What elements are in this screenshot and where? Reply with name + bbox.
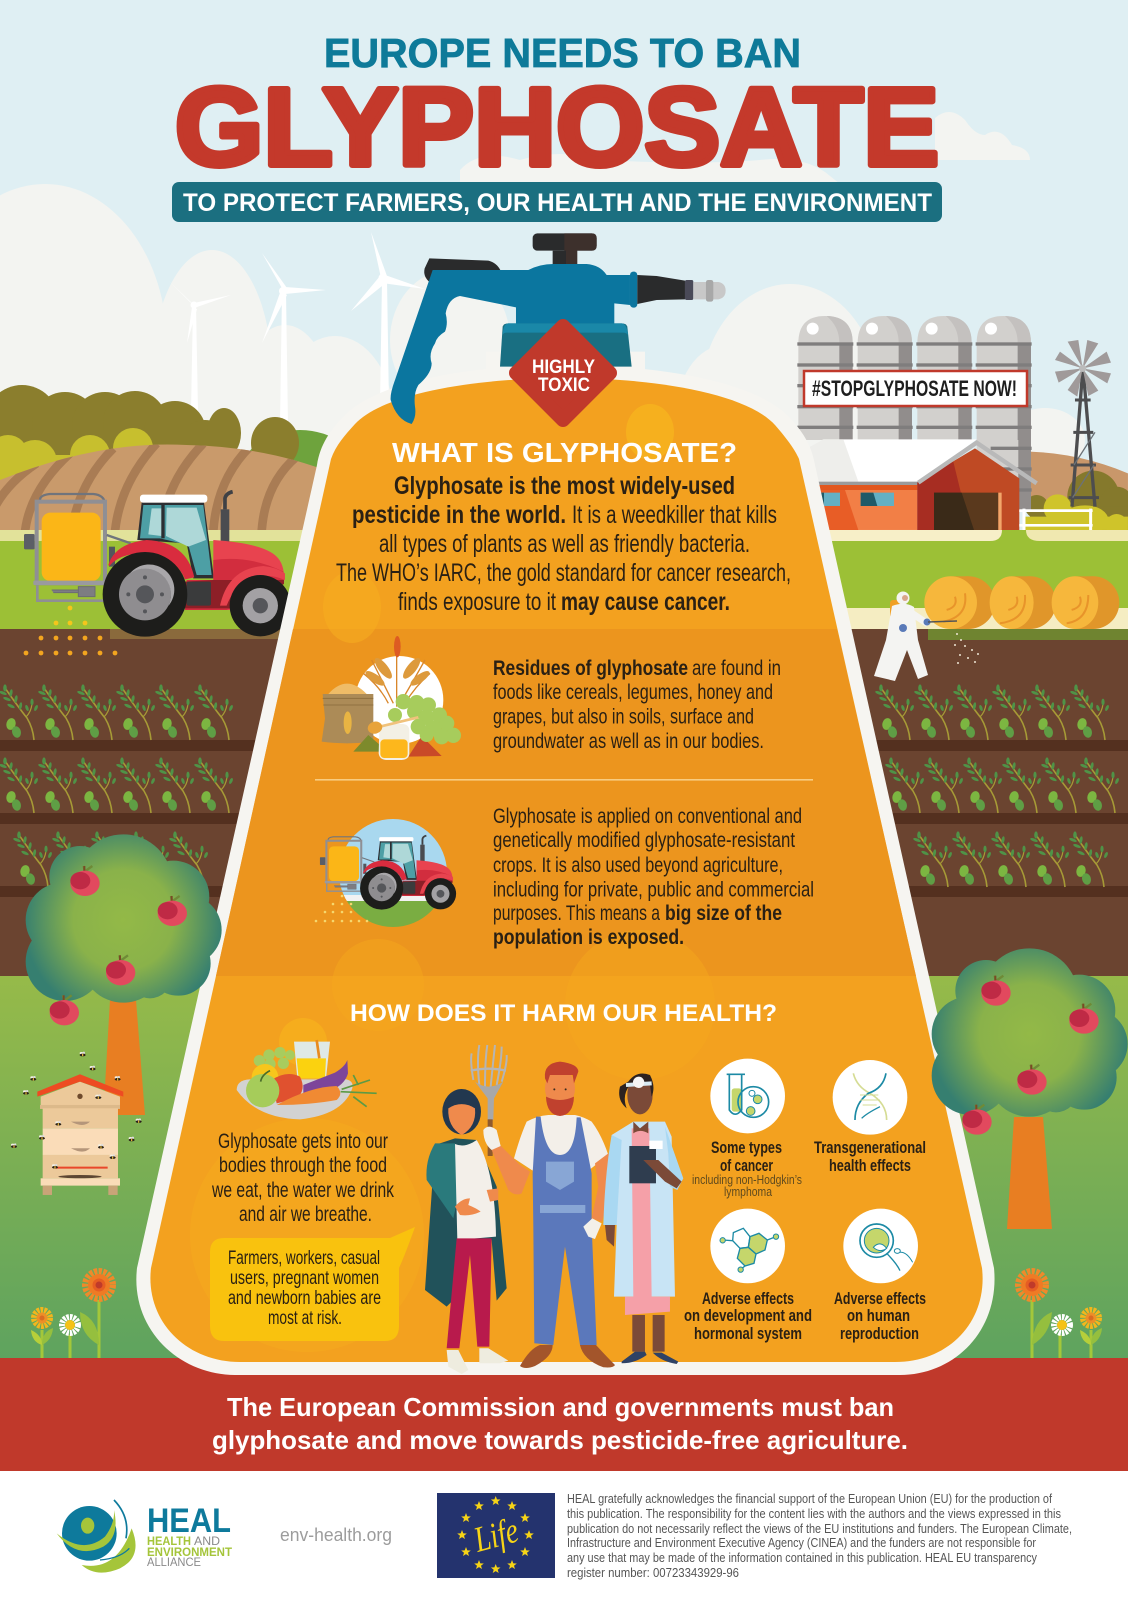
red tractor <box>24 492 291 637</box>
text: how glyphosate is applied: genetically modified glyphosate-resistant <box>493 829 795 852</box>
text: exposure routes <box>211 1130 394 1226</box>
funding disclaimer: register number: 00723343929-96 <box>567 1565 739 1580</box>
intro text block <box>336 472 791 616</box>
sky background <box>0 0 1128 535</box>
highly toxic badge: HIGHLY <box>532 357 595 378</box>
soil with furrows <box>0 629 1128 976</box>
callout: people most at risk: and newborn babies are <box>228 1288 381 1309</box>
text: residues of glyphosate <box>493 657 781 753</box>
icon: molecule <box>710 1209 785 1283</box>
icon: food and grain <box>322 636 461 760</box>
bottle: white outline <box>136 365 995 1375</box>
divider <box>315 779 813 781</box>
plowed hill <box>0 443 333 532</box>
intro text block: finds exposure to it <box>398 588 556 616</box>
intro text block: The WHO’s IARC, the gold standard for cancer research, <box>336 559 791 587</box>
wind turbines <box>169 232 425 425</box>
label: transgenerational health effects: health effects <box>829 1156 911 1175</box>
flowers, left <box>31 1272 112 1358</box>
text: exposure routes: Glyphosate gets into our <box>218 1130 388 1153</box>
LIFE EU flag logo <box>437 1493 555 1578</box>
callout: people most at risk: Farmers, workers, casual <box>228 1248 380 1269</box>
red call-to-action band <box>0 1358 1128 1471</box>
subtitle banner <box>172 182 942 222</box>
text: how glyphosate is applied: big size of the <box>665 902 782 925</box>
label: development and hormonal system <box>684 1289 812 1343</box>
bottle: darker mid band <box>216 629 916 976</box>
label: some types of cancer <box>692 1138 802 1199</box>
text: exposure routes: we eat, the water we drink <box>211 1179 394 1202</box>
funding disclaimer: any use that may be made of the information contained in this publication. HEAL EU transparency <box>567 1550 1037 1565</box>
sign: stop glyphosate: #STOPGLYPHOSATE NOW! <box>812 376 1017 401</box>
bottle: soft circles <box>190 404 715 1352</box>
sign: stop glyphosate <box>804 371 1027 406</box>
intro text block: It is a weedkiller that kills <box>572 501 777 529</box>
text: how glyphosate is applied: Glyphosate is applied on conventional and <box>493 805 802 828</box>
text: exposure routes: bodies through the food <box>219 1154 387 1177</box>
spraying worker <box>874 592 979 681</box>
beehive with bees <box>11 1052 142 1195</box>
sprayer head <box>391 233 726 424</box>
call to action text <box>212 1392 908 1455</box>
HEAL logo text: ENVIRONMENT <box>147 1547 232 1559</box>
text: how glyphosate is applied <box>493 805 814 949</box>
intro text block: Glyphosate is the most widely-used <box>394 472 735 500</box>
LIFE EU flag logo: Life <box>469 1510 522 1560</box>
HEAL logo text <box>147 1502 232 1569</box>
bushes and green hill, left <box>0 385 362 530</box>
text: residues of glyphosate: foods like cereals, legumes, honey and <box>493 681 773 704</box>
callout: people most at risk <box>210 1227 415 1341</box>
highly toxic badge <box>516 326 610 420</box>
label: human reproduction: on human <box>847 1306 910 1325</box>
highly toxic badge: TOXIC <box>538 375 590 396</box>
bottle: orange body <box>150 378 983 1362</box>
icon: test tube and cell <box>710 1059 785 1133</box>
text: residues of glyphosate: grapes, but also in soils, surface and <box>493 706 754 728</box>
seeds trail behind tractor <box>24 606 117 655</box>
main title GLYPHOSATE: GLYPHOSATE <box>175 66 939 189</box>
clouds <box>0 112 1085 516</box>
intro text block: all types of plants as well as friendly bacteria. <box>379 530 750 558</box>
crop rows, right <box>875 684 1120 887</box>
call to action text: glyphosate and move towards pesticide-free agriculture. <box>212 1425 908 1455</box>
subtitle banner: TO PROTECT FARMERS, OUR HEALTH AND THE ENVIRONMENT <box>183 189 932 217</box>
icon: small tractor in circle <box>315 815 460 931</box>
footer background <box>0 1471 1128 1600</box>
text: exposure routes: and air we breathe. <box>239 1203 372 1226</box>
crop rows, left <box>0 684 234 887</box>
icon: DNA helix <box>833 1060 907 1135</box>
label: transgenerational health effects <box>814 1138 926 1175</box>
HEAL logo text: HEALTH <box>147 1536 191 1548</box>
website address: env-health.org <box>280 1525 392 1545</box>
HEAL logo text: HEAL <box>147 1502 231 1540</box>
label: some types of cancer: of cancer <box>720 1156 773 1175</box>
illustration: three people <box>425 1045 683 1374</box>
heading: how does it harm our health: HOW DOES IT HARM OUR HEALTH? <box>350 1000 777 1027</box>
ground strips and grass <box>0 530 1128 629</box>
farm: silos, barn, windmill <box>797 316 1128 536</box>
label: some types of cancer: including non-Hodgkin’s <box>692 1172 802 1187</box>
heading: what is glyphosate: WHAT IS GLYPHOSATE? <box>392 437 737 468</box>
HEAL logo text: AND <box>194 1536 220 1548</box>
funding disclaimer <box>567 1491 1072 1580</box>
label: transgenerational health effects: Transgenerational <box>814 1138 926 1157</box>
funding disclaimer: Infrastructure and Environment Executive Agency (CINEA) and the funders are not responsible for <box>567 1535 1037 1550</box>
label: some types of cancer: Some types <box>711 1138 782 1157</box>
callout: people most at risk: users, pregnant women <box>230 1268 379 1289</box>
green meadow <box>0 976 1128 1360</box>
text: how glyphosate is applied: including for private, public and commercial <box>493 878 814 902</box>
label: human reproduction: Adverse effects <box>834 1289 926 1308</box>
apple tree, right <box>932 948 1128 1229</box>
text: residues of glyphosate: are found in <box>692 657 781 680</box>
text: residues of glyphosate: groundwater as well as in our bodies. <box>493 730 764 753</box>
icon: bowl of food and juice <box>237 1040 377 1119</box>
HEAL logo text: ALLIANCE <box>147 1557 201 1569</box>
label: development and hormonal system: hormonal system <box>694 1324 802 1343</box>
text: residues of glyphosate: Residues of glyphosate <box>493 657 688 680</box>
text: how glyphosate is applied: population is exposed. <box>493 926 684 949</box>
flowers, right <box>1018 1272 1102 1358</box>
intro text block: may cause cancer. <box>561 588 730 616</box>
intro text block: pesticide in the world. <box>352 501 566 529</box>
label: human reproduction: reproduction <box>840 1324 919 1343</box>
main title small line: EUROPE NEEDS TO BAN <box>324 30 801 76</box>
label: development and hormonal system: on development and <box>684 1306 812 1325</box>
icon: egg and sperm <box>843 1209 918 1283</box>
label: development and hormonal system: Adverse effects <box>702 1289 794 1308</box>
label: some types of cancer: lymphoma <box>724 1184 773 1199</box>
HEAL logo mark <box>57 1500 136 1573</box>
apple tree, left <box>26 834 222 1115</box>
text: how glyphosate is applied: purposes. This means a <box>493 902 660 925</box>
text: how glyphosate is applied: crops. It is also used beyond agriculture, <box>493 854 783 877</box>
call to action text: The European Commission and governments must ban <box>227 1392 894 1422</box>
hay bales <box>924 576 1119 629</box>
callout: people most at risk: most at risk. <box>268 1308 342 1329</box>
label: human reproduction <box>834 1289 926 1343</box>
